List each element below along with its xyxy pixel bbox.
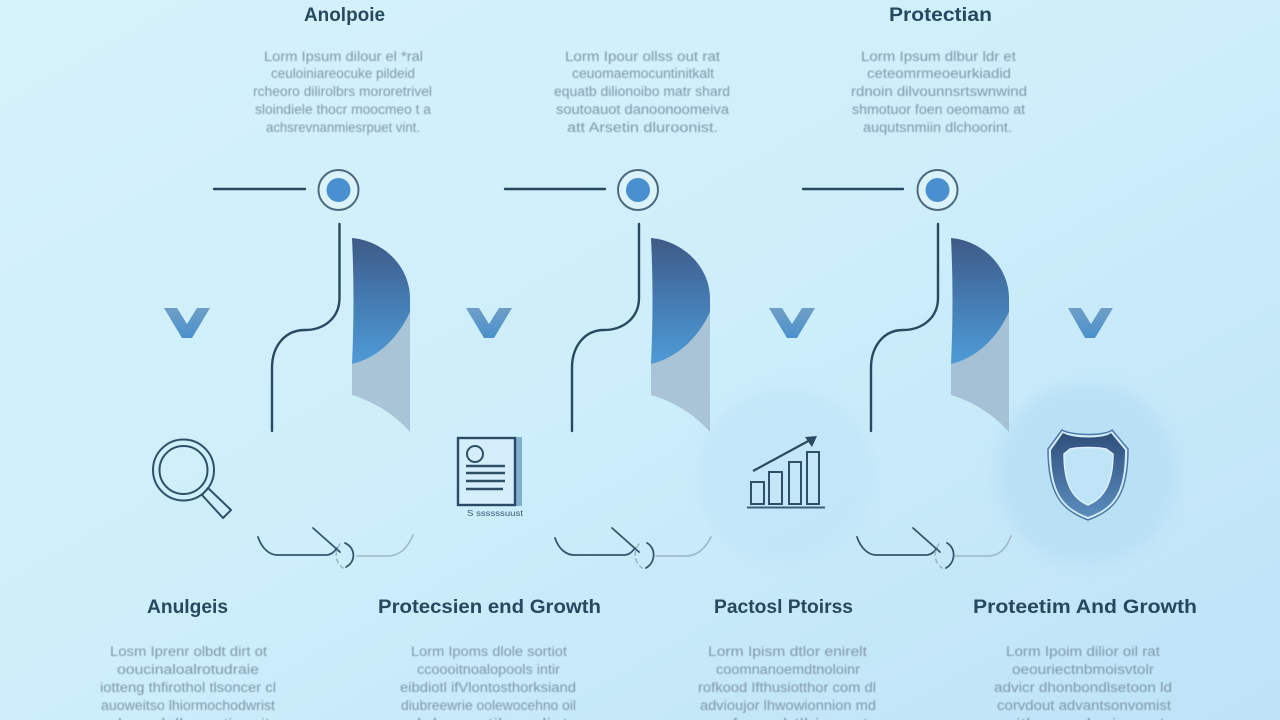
text block: top column 1: sloindiele thocr moocmeo t a <box>255 102 431 117</box>
document caption: S ssssssuust <box>467 508 524 518</box>
text block: top column 2: soutoauot danoonoomeiva <box>556 102 730 117</box>
text block: top column 1: achsrevnanmiesrpuet vint. <box>266 120 420 135</box>
text block: bottom column 3: rofkood Ifthusiotthor com dl <box>698 680 876 695</box>
text block: bottom column 2: Lorm Ipoms dlole sortiot <box>411 644 567 659</box>
text block: top column 3: shmotuor foen oeomamo at <box>852 102 1025 117</box>
text block: bottom column 3: coomnanoemdtnoloinr <box>716 662 861 677</box>
halo: shield icon background <box>997 383 1177 563</box>
text block: bottom column 3: Lorm Ipism dtlor enirelt <box>708 644 867 659</box>
heading: bottom Anulgeis: Anulgeis <box>147 597 228 618</box>
connector curve 1 <box>272 224 340 431</box>
text block: bottom column 3: advioujor lhwowionnion md <box>700 698 876 713</box>
heading: top Protectian: Protectian <box>889 5 992 26</box>
icon: shield <box>1048 430 1128 520</box>
text block: bottom column 2 <box>400 644 576 720</box>
text block: top column 3: auqutsnmiin dlchoorint. <box>863 120 1012 135</box>
text block: bottom column 1: iotteng thfirothol tlsoncer cl <box>100 680 276 695</box>
text block: bottom column 4: oeouriectnbmoisvtolr <box>1012 662 1155 677</box>
chevron 4 <box>1068 308 1113 338</box>
connector hook 3 <box>857 528 1011 568</box>
connector curve 3 <box>871 224 938 431</box>
text block: bottom column 4: corvdout advantsonvomist <box>997 698 1171 713</box>
text block: bottom column 1 <box>100 644 276 720</box>
text block: bottom column 2: diubreewrie oolewocehno oil <box>401 698 576 713</box>
connector hook 1 <box>258 528 413 568</box>
icon: growth bar chart <box>747 436 825 508</box>
text block: bottom column 1: Losm Iprenr olbdt dirt ot <box>110 644 267 659</box>
chevron 1 <box>164 308 210 338</box>
text block: bottom column 2: ccoooitnoalopools intir <box>417 662 561 677</box>
text block: top column 1: ceuloiniareocuke pildeid <box>271 66 415 81</box>
halo: chart icon background <box>697 387 873 563</box>
text block: top column 2: ceuomaemocuntinitkalt <box>572 66 714 81</box>
text block: bottom column 1: ooucinaloalrotudraie <box>117 662 259 677</box>
chevron 2 <box>466 308 512 338</box>
timeline node group 1 <box>214 170 358 210</box>
heading: bottom Pactosl Ptoirss: Pactosl Ptoirss <box>714 597 853 618</box>
text block: top column 2: att Arsetin dluroonist. <box>567 120 718 135</box>
text block: top column 2: equatb dilionoibo matr shard <box>554 84 730 99</box>
text block: bottom column 4: Lorm Ipoim dilior oil rat <box>1006 644 1160 659</box>
text block: bottom column 3 <box>698 644 876 720</box>
heading: bottom Protecsien end Growth: Protecsien end Growth <box>378 597 601 618</box>
heading: top Anolpoie: Anolpoie <box>304 5 385 26</box>
connector hook 2 <box>555 528 711 568</box>
shape: blue half form 3 <box>951 238 1009 432</box>
shape: blue half form 2 <box>651 238 710 432</box>
timeline node group 3 <box>803 170 958 210</box>
text block: top column 2: Lorm Ipour ollss out rat <box>565 49 720 64</box>
shape: blue half form 1 <box>352 238 410 432</box>
icon: document <box>458 437 524 518</box>
heading: bottom Proteetim And Growth: Proteetim And Growth <box>973 597 1197 618</box>
chevron 3 <box>769 308 815 338</box>
text block: bottom column 4: advicr dhonbondlsetoon ld <box>994 680 1172 695</box>
text block: top column 2 <box>554 49 730 135</box>
text block: top column 3 <box>851 49 1027 135</box>
text block: top column 1: Lorm Ipsum dilour el *ral <box>264 49 423 64</box>
text block: top column 1: rcheoro dilirolbrs mororetrivel <box>253 84 432 99</box>
connector curve 2 <box>572 224 639 431</box>
text block: bottom column 4 <box>994 644 1172 720</box>
text block: bottom column 2: eibdiotl ifVlontosthorksiand <box>400 680 576 695</box>
text block: top column 3: Lorm Ipsum dlbur ldr et <box>861 49 1016 64</box>
text block: top column 3: rdnoin dilvounnsrtswnwind <box>851 84 1027 99</box>
text block: top column 1 <box>253 49 432 135</box>
icon: magnifying glass <box>153 440 231 518</box>
text block: bottom column 1: auoweitso lhiormochodwrist <box>101 698 275 713</box>
text block: top column 3: ceteomrmeoeurkiadid <box>867 66 1011 81</box>
timeline node group 2 <box>505 170 658 210</box>
